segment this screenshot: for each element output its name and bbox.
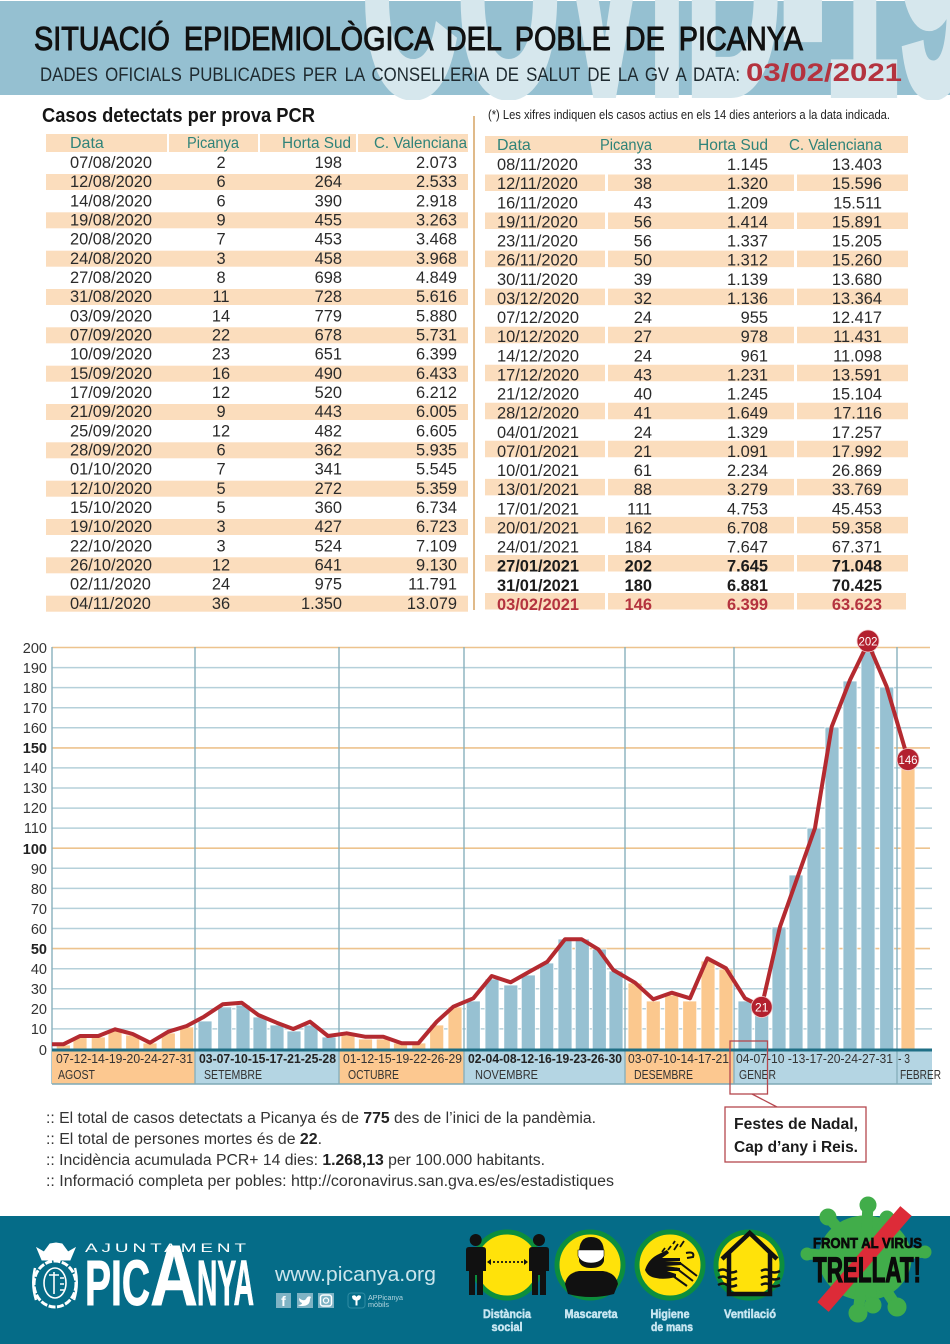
left table rows: 20/08/2020 bbox=[70, 231, 152, 249]
month names bbox=[58, 1067, 941, 1082]
left table rows: 390 bbox=[315, 192, 342, 210]
month names: AGOST bbox=[58, 1067, 95, 1082]
left table rows: 22 bbox=[212, 326, 230, 344]
icon labels: de mans bbox=[651, 1320, 693, 1334]
right table rows: 07/01/2021 bbox=[497, 443, 579, 461]
logo: Ajuntament de Picanya bbox=[33, 1228, 254, 1324]
right table rows: 1.414 bbox=[727, 213, 768, 231]
left table rows: 3 bbox=[216, 518, 226, 536]
right table rows: 6.708 bbox=[727, 519, 768, 537]
left table rows: 22/10/2020 bbox=[70, 537, 152, 555]
bars: octubre bbox=[341, 1007, 462, 1049]
left table header: Horta Sud bbox=[282, 135, 351, 152]
right table rows: 56 bbox=[634, 213, 652, 231]
left table rows: 7.109 bbox=[416, 537, 457, 555]
bars: gener bbox=[738, 651, 894, 1049]
right table rows: 7.645 bbox=[727, 558, 768, 576]
badge: front al virus bbox=[801, 1197, 931, 1322]
marker: 202 bbox=[857, 630, 879, 652]
date highlight: 03/02/2021 bbox=[746, 59, 902, 87]
logo: Ajuntament de Picanya: PIC bbox=[85, 1247, 150, 1319]
left table rows: 975 bbox=[315, 576, 342, 594]
right table rows: 12/11/2020 bbox=[497, 175, 578, 193]
right table rows: 67.371 bbox=[832, 539, 882, 557]
right table rows: 31/01/2021 bbox=[497, 577, 579, 595]
left table rows: 12 bbox=[212, 422, 230, 440]
left table rows: 482 bbox=[315, 422, 342, 440]
left table rows: 453 bbox=[315, 231, 342, 249]
x axis dates: 04-07-10 -13-17-20-24-27-31 bbox=[736, 1051, 893, 1066]
right table rows: 11.098 bbox=[833, 347, 882, 365]
right table rows: 45.453 bbox=[832, 500, 882, 518]
right table rows: 17.257 bbox=[832, 424, 882, 442]
panel: left table bbox=[46, 134, 468, 613]
icon labels: Distància bbox=[483, 1307, 531, 1321]
social icons: f bbox=[281, 1293, 286, 1309]
right table rows: 27/01/2021 bbox=[497, 558, 579, 576]
text block: totals: :: Incidència acumulada PCR+ 14 dies: 1.268,13 per 100.000 habitants. bbox=[46, 1152, 545, 1169]
left table rows: 17/09/2020 bbox=[70, 384, 152, 402]
left table rows: 3 bbox=[216, 537, 226, 555]
text block: totals bbox=[46, 1110, 614, 1190]
right table rows: 33.769 bbox=[832, 481, 882, 499]
right table rows: 26/11/2020 bbox=[497, 252, 578, 270]
left table rows: 458 bbox=[315, 250, 342, 268]
left table header: C. Valenciana bbox=[374, 135, 467, 152]
right table rows: 24 bbox=[634, 347, 652, 365]
left table rows: 6.212 bbox=[416, 384, 457, 402]
right table rows: 32 bbox=[634, 290, 652, 308]
y axis labels: 160 bbox=[23, 721, 47, 737]
right table rows: 03/12/2020 bbox=[497, 290, 579, 308]
right table rows: 04/01/2021 bbox=[497, 424, 579, 442]
icon: mask bbox=[557, 1232, 623, 1298]
right table rows: 1.337 bbox=[727, 233, 768, 251]
left table rows: 6.005 bbox=[416, 403, 457, 421]
left table rows: 01/10/2020 bbox=[70, 461, 152, 479]
right table rows: 21/12/2020 bbox=[497, 386, 579, 404]
website: www.picanya.org bbox=[274, 1264, 436, 1286]
right table rows: 59.358 bbox=[832, 519, 882, 537]
left table rows: 6 bbox=[216, 192, 226, 210]
left table rows: 3.263 bbox=[416, 212, 457, 230]
left table rows: 6 bbox=[216, 442, 226, 460]
left table rows: 23 bbox=[212, 346, 230, 364]
left table rows: 362 bbox=[315, 442, 342, 460]
left table rows: 36 bbox=[212, 595, 230, 613]
right table rows: 1.312 bbox=[727, 252, 768, 270]
bars: setembre bbox=[198, 1005, 336, 1049]
logo: Ajuntament de Picanya: AJUNTAMENT bbox=[85, 1241, 250, 1255]
left table rows: 6.734 bbox=[416, 499, 457, 517]
callout: holidays bbox=[725, 1094, 866, 1162]
right table rows: 6.399 bbox=[727, 596, 768, 614]
logo: Ajuntament de Picanya: A bbox=[150, 1228, 198, 1324]
left table rows: 779 bbox=[315, 307, 342, 325]
y axis labels: 150 bbox=[23, 741, 47, 757]
month names: NOVEMBRE bbox=[475, 1067, 538, 1082]
right table rows: 1.136 bbox=[727, 290, 768, 308]
y axis labels: 180 bbox=[23, 681, 47, 697]
x axis dates: 03-07-10-15-17-21-25-28 bbox=[199, 1051, 336, 1066]
right table rows: 13.591 bbox=[832, 366, 882, 384]
right table rows: 1.329 bbox=[727, 424, 768, 442]
left table header: Picanya bbox=[187, 135, 239, 152]
right table header: C. Valenciana bbox=[789, 137, 882, 154]
right table rows: 24 bbox=[634, 309, 652, 327]
marker: 146: 146 bbox=[898, 753, 918, 767]
right table rows: 15.891 bbox=[832, 213, 882, 231]
social icons bbox=[276, 1293, 403, 1309]
icon: hand hygiene bbox=[637, 1232, 703, 1298]
left table rows: 11.791 bbox=[408, 576, 457, 594]
left table rows: 3.968 bbox=[416, 250, 457, 268]
left table header: Data bbox=[70, 135, 104, 152]
right table rows: 43 bbox=[634, 366, 652, 384]
right table rows: 146 bbox=[625, 596, 652, 614]
right table rows: 1.320 bbox=[727, 175, 768, 193]
right table rows: 978 bbox=[741, 328, 768, 346]
left table rows: 3 bbox=[216, 250, 226, 268]
right table rows: 202 bbox=[625, 558, 652, 576]
left table rows: 14/08/2020 bbox=[70, 192, 152, 210]
right table rows: 6.881 bbox=[727, 577, 768, 595]
month names: OCTUBRE bbox=[348, 1067, 399, 1082]
right table rows: 184 bbox=[625, 539, 652, 557]
right table rows: 15.104 bbox=[832, 386, 882, 404]
icon: ventilation bbox=[716, 1232, 782, 1298]
social icons: mòbils bbox=[368, 1302, 390, 1309]
x axis dates: 02-04-08-12-16-19-23-26-30 bbox=[468, 1051, 622, 1066]
subtitle: DADES OFICIALS PUBLICADES PER LA CONSELLERIA DE SALUT DE LA GV A DATA: bbox=[40, 64, 740, 86]
left table rows: 12 bbox=[212, 556, 230, 574]
left table rows: 5.935 bbox=[416, 442, 457, 460]
y axis labels: 90 bbox=[31, 862, 47, 878]
left table rows: 272 bbox=[315, 480, 342, 498]
left table rows: 6.723 bbox=[416, 518, 457, 536]
right table rows: 63.623 bbox=[832, 596, 882, 614]
right table rows: 13.364 bbox=[832, 290, 882, 308]
right table header bbox=[497, 137, 882, 154]
left table rows: 6 bbox=[216, 173, 226, 191]
icon labels bbox=[483, 1307, 776, 1334]
badge: front al virus: FRONT AL VIRUS bbox=[813, 1235, 922, 1252]
y axis labels: 100 bbox=[23, 842, 47, 858]
left table rows: 04/11/2020 bbox=[70, 595, 151, 613]
marker: 21: 21 bbox=[755, 1000, 769, 1014]
left table rows: 9 bbox=[216, 403, 226, 421]
y axis labels: 170 bbox=[23, 701, 47, 717]
y axis labels: 70 bbox=[31, 902, 47, 918]
month names: DESEMBRE bbox=[634, 1067, 693, 1082]
y axis labels: 140 bbox=[23, 761, 47, 777]
right table rows: 43 bbox=[634, 194, 652, 212]
month names: GENER bbox=[739, 1067, 776, 1082]
right table rows: 180 bbox=[625, 577, 652, 595]
bars: agost bbox=[56, 1027, 194, 1049]
left table rows: 678 bbox=[315, 326, 342, 344]
left table rows: 25/09/2020 bbox=[70, 422, 152, 440]
right table rows: 14/12/2020 bbox=[497, 347, 579, 365]
right table rows: 1.649 bbox=[727, 405, 768, 423]
right table rows: 71.048 bbox=[832, 558, 882, 576]
right table rows: 17.992 bbox=[832, 443, 882, 461]
right table rows: 41 bbox=[634, 405, 652, 423]
right table rows: 19/11/2020 bbox=[497, 213, 578, 231]
right table rows: 162 bbox=[625, 519, 652, 537]
x axis dates bbox=[56, 1051, 910, 1066]
left table rows: 360 bbox=[315, 499, 342, 517]
bars: desembre bbox=[628, 961, 733, 1049]
footer band bbox=[0, 1216, 950, 1344]
left table rows: 490 bbox=[315, 365, 342, 383]
right table rows: 1.245 bbox=[727, 386, 768, 404]
panel: right table bbox=[485, 136, 908, 614]
left table rows: 2.073 bbox=[416, 154, 457, 172]
left table rows: 427 bbox=[315, 518, 342, 536]
left table rows: 12 bbox=[212, 384, 230, 402]
right table rows: 10/12/2020 bbox=[497, 328, 579, 346]
left table rows: 12/10/2020 bbox=[70, 480, 152, 498]
left table rows: 728 bbox=[315, 288, 342, 306]
left table rows: 24 bbox=[212, 576, 230, 594]
icon labels: Mascareta bbox=[564, 1307, 618, 1321]
left table rows: 2.918 bbox=[416, 192, 457, 210]
month names: SETEMBRE bbox=[204, 1067, 262, 1082]
left table rows: 264 bbox=[315, 173, 342, 191]
left table rows: 5.616 bbox=[416, 288, 457, 306]
left table rows: 28/09/2020 bbox=[70, 442, 152, 460]
right table rows: 24 bbox=[634, 424, 652, 442]
left table rows: 6.605 bbox=[416, 422, 457, 440]
right table rows: 27 bbox=[634, 328, 652, 346]
left table rows: 5 bbox=[216, 480, 226, 498]
right table rows: 12.417 bbox=[832, 309, 882, 327]
right table rows: 28/12/2020 bbox=[497, 405, 579, 423]
text block: totals: :: El total de persones mortes és de 22. bbox=[46, 1131, 322, 1148]
right table rows bbox=[497, 156, 882, 614]
left table rows: 9.130 bbox=[416, 556, 457, 574]
right table rows: 10/01/2021 bbox=[497, 462, 579, 480]
right table rows: 17.116 bbox=[833, 405, 882, 423]
text: NYA bbox=[197, 1247, 254, 1319]
right table rows: 3.279 bbox=[727, 481, 768, 499]
left table rows: 5.359 bbox=[416, 480, 457, 498]
y axis labels: 80 bbox=[31, 882, 47, 898]
right table rows: 40 bbox=[634, 386, 652, 404]
left table rows: 13.079 bbox=[407, 595, 457, 613]
y axis labels: 110 bbox=[24, 821, 47, 837]
right table rows: 39 bbox=[634, 271, 652, 289]
right table rows: 61 bbox=[634, 462, 652, 480]
right table rows: 13.680 bbox=[832, 271, 882, 289]
chart: active cases bbox=[23, 630, 941, 1084]
right table rows: 16/11/2020 bbox=[497, 194, 578, 212]
left table rows: 15/10/2020 bbox=[70, 499, 152, 517]
left table rows: 7 bbox=[216, 461, 226, 479]
marker: 21 bbox=[751, 996, 772, 1018]
right table rows: 961 bbox=[741, 347, 768, 365]
line: active cases trend bbox=[52, 643, 908, 1044]
right table rows: 17/12/2020 bbox=[497, 366, 579, 384]
left table rows: 198 bbox=[315, 154, 342, 172]
right table rows: 15.205 bbox=[832, 233, 882, 251]
left table rows: 14 bbox=[212, 307, 230, 325]
marker: 202: 202 bbox=[858, 634, 878, 648]
y axis labels bbox=[23, 641, 47, 1059]
right table rows: 03/02/2021 bbox=[497, 596, 579, 614]
left table rows: 4.849 bbox=[416, 269, 457, 287]
x axis dates: 03-07-10-14-17-21 bbox=[628, 1051, 729, 1066]
left table rows: 5.545 bbox=[416, 461, 457, 479]
right table rows: 111 bbox=[627, 500, 652, 518]
left table rows: 2 bbox=[216, 154, 226, 172]
header band bbox=[0, 0, 950, 100]
right table rows: 1.139 bbox=[727, 271, 768, 289]
right table rows: 15.596 bbox=[832, 175, 882, 193]
y axis labels: 20 bbox=[31, 1002, 47, 1018]
left table rows: 26/10/2020 bbox=[70, 556, 152, 574]
left table rows: 1.350 bbox=[301, 595, 342, 613]
right table rows: 56 bbox=[634, 233, 652, 251]
left table rows: 31/08/2020 bbox=[70, 288, 152, 306]
right table rows: 33 bbox=[634, 156, 652, 174]
left table rows: 11 bbox=[212, 288, 230, 306]
y axis labels: 40 bbox=[31, 962, 47, 978]
right table rows: 15.511 bbox=[833, 194, 882, 212]
y axis labels: 0 bbox=[39, 1043, 47, 1059]
right table rows: 13.403 bbox=[832, 156, 882, 174]
right table rows: 30/11/2020 bbox=[497, 271, 578, 289]
y axis labels: 190 bbox=[23, 661, 47, 677]
x axis dates: 01-12-15-19-22-26-29 bbox=[343, 1051, 462, 1066]
left table rows: 5 bbox=[216, 499, 226, 517]
left table rows: 698 bbox=[315, 269, 342, 287]
left table rows: 2.533 bbox=[416, 173, 457, 191]
left table rows: 7 bbox=[216, 231, 226, 249]
left table rows: 15/09/2020 bbox=[70, 365, 152, 383]
left table rows: 24/08/2020 bbox=[70, 250, 152, 268]
right table rows: 11.431 bbox=[833, 328, 882, 346]
right table rows: 24/01/2021 bbox=[497, 539, 579, 557]
icon labels: Ventilació bbox=[724, 1307, 776, 1321]
right table header: Data bbox=[497, 137, 531, 154]
right table rows: 2.234 bbox=[727, 462, 768, 480]
x axis dates: 07-12-14-19-20-24-27-31 bbox=[56, 1051, 193, 1066]
left table rows: 520 bbox=[315, 384, 342, 402]
right table rows: 15.260 bbox=[832, 252, 882, 270]
right table rows: 26.869 bbox=[832, 462, 882, 480]
month bands bbox=[52, 1051, 932, 1084]
left table rows: 3.468 bbox=[416, 231, 457, 249]
right table rows: 08/11/2020 bbox=[497, 156, 578, 174]
left table rows: 6.433 bbox=[416, 365, 457, 383]
footnote: (*) Les xifres indiquen els casos actius en els 14 dies anteriors a la data indicada. bbox=[488, 108, 890, 122]
left table rows: 5.731 bbox=[416, 326, 457, 344]
right table rows: 13/01/2021 bbox=[497, 481, 579, 499]
icon: crest bbox=[33, 1243, 77, 1307]
left table header bbox=[70, 135, 467, 152]
right table header: Picanya bbox=[600, 137, 652, 154]
left table rows: 6.399 bbox=[416, 346, 457, 364]
title: SITUACIÓ EPIDEMIOLÒGICA DEL POBLE DE PICANYA bbox=[34, 20, 804, 58]
y axis labels: 50 bbox=[31, 942, 47, 958]
right table rows: 1.209 bbox=[727, 194, 768, 212]
y axis labels: 60 bbox=[31, 922, 47, 938]
right table header: Horta Sud bbox=[698, 137, 768, 154]
right table rows: 88 bbox=[634, 481, 652, 499]
y axis labels: 130 bbox=[23, 781, 47, 797]
right table rows: 7.647 bbox=[727, 539, 768, 557]
left table rows: 19/08/2020 bbox=[70, 212, 152, 230]
right table rows: 955 bbox=[741, 309, 768, 327]
left table rows: 5.880 bbox=[416, 307, 457, 325]
callout: holidays: Festes de Nadal, bbox=[734, 1116, 858, 1133]
right table rows: 1.231 bbox=[727, 366, 768, 384]
bar: febrer bbox=[901, 757, 915, 1049]
right table rows: 23/11/2020 bbox=[497, 233, 578, 251]
right table rows: 07/12/2020 bbox=[497, 309, 579, 327]
y axis labels: 10 bbox=[31, 1022, 47, 1038]
text block: totals: :: Informació completa per pobles: http://coronavirus.san.gva.es/es/estadistiques bbox=[46, 1173, 614, 1190]
left table rows: 443 bbox=[315, 403, 342, 421]
icon: social distance bbox=[466, 1232, 549, 1298]
x axis dates: - 3 bbox=[898, 1051, 910, 1066]
left table rows: 03/09/2020 bbox=[70, 307, 152, 325]
left table rows: 07/09/2020 bbox=[70, 326, 152, 344]
left table rows: 9 bbox=[216, 212, 226, 230]
social icons: APPicanya bbox=[368, 1295, 403, 1302]
left table rows: 07/08/2020 bbox=[70, 154, 152, 172]
left table rows: 12/08/2020 bbox=[70, 173, 152, 191]
right table rows: 50 bbox=[634, 252, 652, 270]
right table rows: 17/01/2021 bbox=[497, 500, 579, 518]
y axis labels: 200 bbox=[23, 641, 47, 657]
callout: holidays: Cap d’any i Reis. bbox=[734, 1139, 858, 1156]
left table rows: 651 bbox=[315, 346, 342, 364]
left table rows: 10/09/2020 bbox=[70, 346, 152, 364]
right table rows: 70.425 bbox=[832, 577, 882, 595]
heading: PCR cases: Casos detectats per prova PCR bbox=[42, 105, 316, 127]
left table rows bbox=[70, 154, 457, 613]
left table rows: 8 bbox=[216, 269, 226, 287]
marker: 146 bbox=[897, 748, 919, 770]
left table rows: 02/11/2020 bbox=[70, 576, 151, 594]
left table rows: 455 bbox=[315, 212, 342, 230]
left table rows: 524 bbox=[315, 537, 342, 555]
left table rows: 27/08/2020 bbox=[70, 269, 152, 287]
left table rows: 19/10/2020 bbox=[70, 518, 152, 536]
bars: novembre bbox=[466, 939, 623, 1049]
y axis labels: 30 bbox=[31, 982, 47, 998]
left table rows: 16 bbox=[212, 365, 230, 383]
left table rows: 341 bbox=[315, 461, 342, 479]
right table rows: 1.091 bbox=[727, 443, 768, 461]
icon labels: social bbox=[492, 1320, 522, 1334]
right table rows: 4.753 bbox=[727, 500, 768, 518]
right table rows: 20/01/2021 bbox=[497, 519, 579, 537]
text block: totals: :: El total de casos detectats a Picanya és de 775 des de l’inici de la pandèmia. bbox=[46, 1110, 596, 1127]
y axis labels: 120 bbox=[23, 801, 47, 817]
highlight box on chart bbox=[730, 1041, 768, 1094]
left table rows: 641 bbox=[315, 556, 342, 574]
icon labels: Higiene bbox=[650, 1307, 690, 1321]
right table rows: 38 bbox=[634, 175, 652, 193]
right table rows: 21 bbox=[634, 443, 652, 461]
left table rows: 21/09/2020 bbox=[70, 403, 152, 421]
right table rows: 1.145 bbox=[727, 156, 768, 174]
